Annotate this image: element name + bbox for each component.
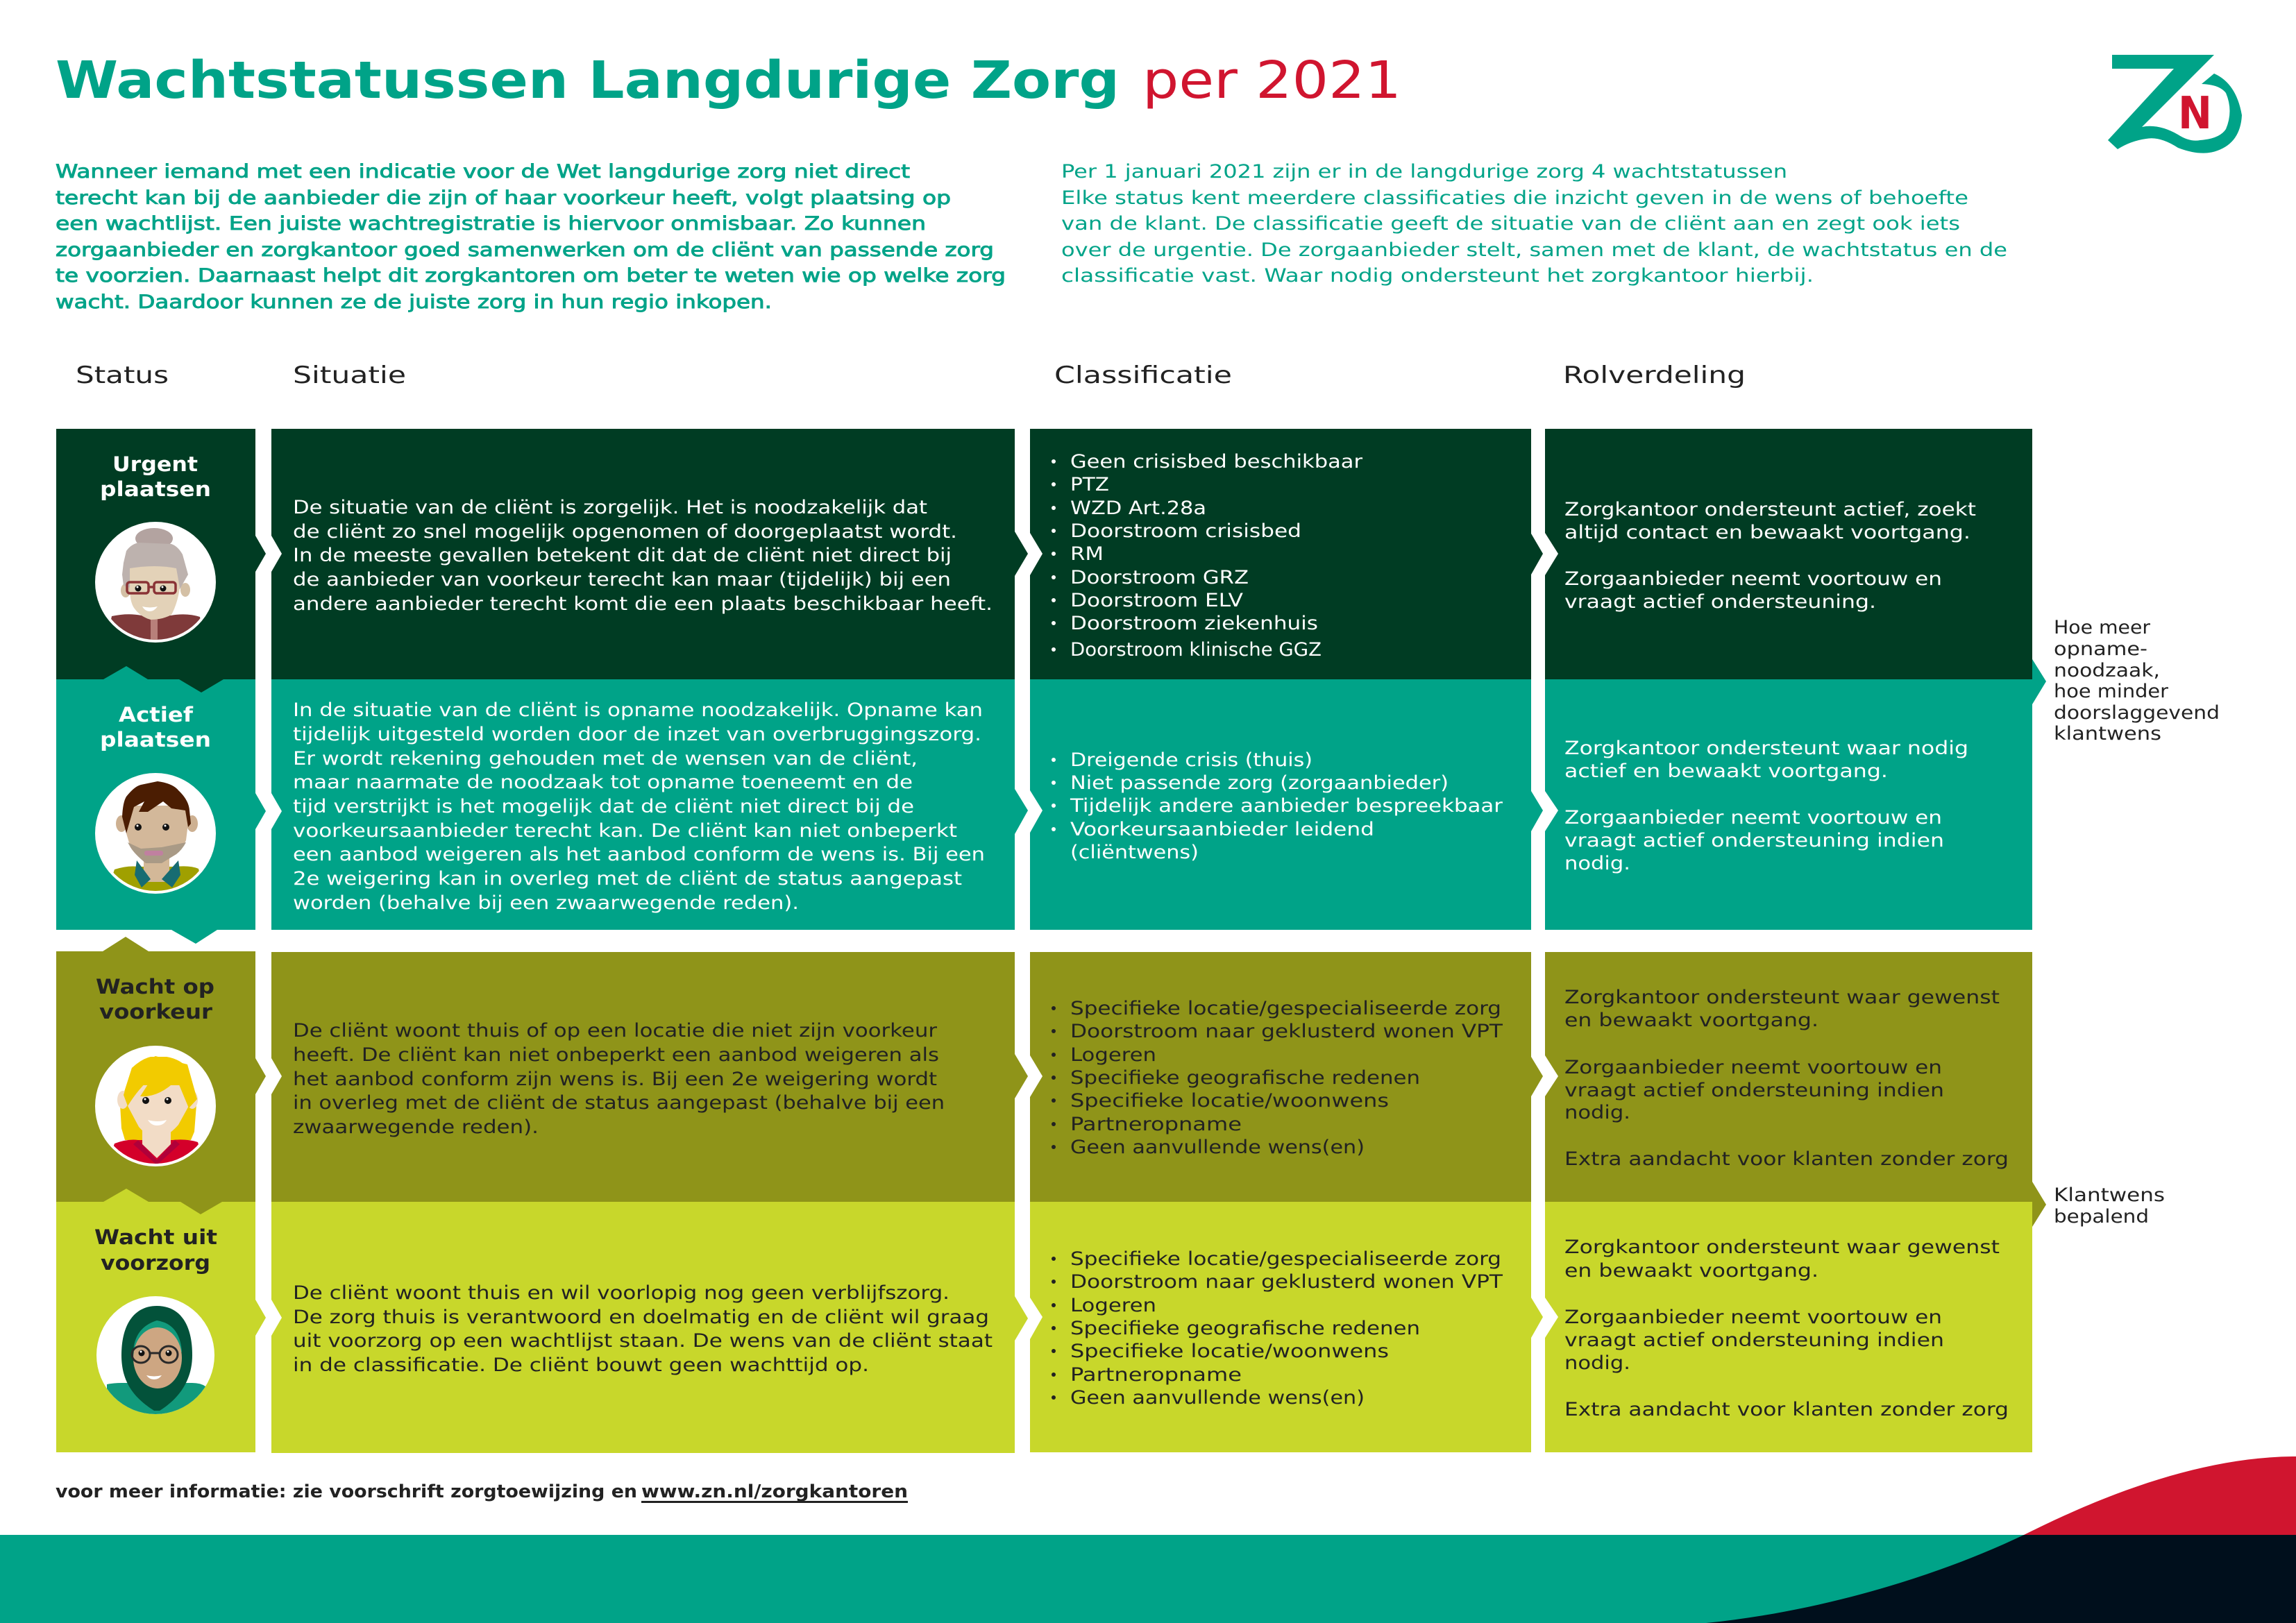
- cell: actief rolverdeling: vraagt actief ondersteuning indien: [1564, 830, 1944, 851]
- status label: wacht op voorkeur: [96, 975, 214, 1023]
- icon: woman with headscarf portrait: [96, 1296, 214, 1418]
- intro text right: classificatie vast. Waar nodig ondersteunt het zorgkantoor hierbij.: [1061, 265, 1814, 287]
- cell: wacht uit voorzorg status background: [56, 1189, 266, 1452]
- label: hoe meer opnamenoodzaak: noodzaak,: [2054, 660, 2160, 681]
- cell: urgent rolverdeling: Zorgkantoor ondersteunt actief, zoekt: [1564, 499, 1976, 520]
- intro text right: [1061, 161, 2007, 287]
- label: hoe meer opnamenoodzaak: [2054, 617, 2220, 745]
- cell: urgent rolverdeling: Zorgaanbieder neemt voortouw en: [1564, 568, 1942, 590]
- cell: urgent situatie: De situatie van de cliënt is zorgelijk. Het is noodzakelijk dat: [293, 497, 927, 518]
- status label: urgent plaatsen: plaatsen: [100, 477, 211, 501]
- logo: ZN: [2108, 55, 2242, 153]
- cell: wacht uit voorzorg classificatie: Logeren: [1070, 1295, 1156, 1316]
- cell: wacht op voorkeur situatie: De cliënt woont thuis of op een locatie die niet zijn voorkeur: [293, 1020, 938, 1042]
- cell: urgent rolverdeling: vraagt actief ondersteuning.: [1564, 591, 1876, 613]
- cell: actief rolverdeling: nodig.: [1564, 853, 1630, 874]
- cell: wacht op voorkeur rolverdeling: Extra aandacht voor klanten zonder zorg: [1564, 1148, 2009, 1170]
- cell: wacht op voorkeur situatie: het aanbod conform zijn wens is. Bij een 2e weigering wordt: [293, 1069, 937, 1090]
- cell: wacht uit voorzorg situatie: uit voorzorg op een wachtlijst staan. De wens van de cliënt staat: [293, 1330, 993, 1352]
- cell: urgent situatie: de cliënt zo snel mogelijk opgenomen of doorgeplaatst wordt.: [293, 521, 957, 543]
- cell: wacht op voorkeur status background: [56, 937, 266, 1202]
- column headings: Rolverdeling: [1563, 362, 1746, 389]
- cell: wacht uit voorzorg classificatie: Specifieke locatie/gespecialiseerde zorg: [1070, 1248, 1501, 1270]
- column headings: [76, 362, 1746, 389]
- cell: wacht uit voorzorg rolverdeling: en bewaakt voortgang.: [1564, 1260, 1818, 1282]
- cell: actief rolverdeling: Zorgaanbieder neemt voortouw en: [1564, 807, 1942, 829]
- cell: urgent rolverdeling: altijd contact en bewaakt voortgang.: [1564, 522, 1970, 543]
- label: klantwens bepalend: Klantwens: [2054, 1184, 2165, 1206]
- footer note: voor meer informatie: zie voorschrift zorgtoewijzing en: [56, 1481, 637, 1502]
- cell: actief situatie: een aanbod weigeren als het aanbod conform de wens is. Bij een: [293, 844, 985, 865]
- status label: wacht uit voorzorg: Wacht uit: [94, 1225, 217, 1249]
- cell: urgent situatie: [271, 429, 1028, 679]
- cell: actief situatie: voorkeursaanbieder terecht kan. De cliënt kan niet onbeperkt: [293, 820, 957, 842]
- cell: urgent situatie: andere aanbieder terecht komt die een plaats beschikbaar heeft.: [293, 593, 993, 615]
- status label: actief plaatsen: Actief: [119, 703, 193, 726]
- cell: wacht op voorkeur situatie: in overleg met de cliënt de status aangepast (behalve bij een: [293, 1092, 945, 1114]
- cell: actief situatie: tijd verstrijkt is het mogelijk dat de cliënt niet direct bij de: [293, 796, 914, 817]
- cell: actief classificatie: [1030, 679, 1543, 930]
- cell: wacht uit voorzorg classificatie: Partneropname: [1070, 1364, 1242, 1386]
- cell: urgent classificatie: Doorstroom crisisbed: [1070, 520, 1301, 542]
- cell: urgent status background: [56, 429, 266, 679]
- intro text right: Elke status kent meerdere classificaties die inzicht geven in de wens of behoefte: [1061, 187, 1968, 209]
- column headings: Classificatie: [1054, 362, 1232, 389]
- icon: older woman portrait: [95, 522, 216, 645]
- cell: urgent classificatie: Geen crisisbed beschikbaar: [1070, 451, 1363, 473]
- cell: urgent classificatie: PTZ: [1070, 474, 1109, 495]
- bottom band: [0, 1456, 2296, 1623]
- cell: wacht op voorkeur classificatie: Specifieke locatie/gespecialiseerde zorg: [1070, 998, 1501, 1019]
- cell: actief status background: [56, 666, 266, 930]
- cell: actief situatie: maar naarmate de noodzaak tot opname toeneemt en de: [293, 772, 913, 793]
- tab: actief down: [171, 930, 217, 944]
- cell: wacht op voorkeur classificatie: Specifieke geografische redenen: [1070, 1067, 1420, 1089]
- intro text left: te voorzien. Daarnaast helpt dit zorgkantoren om beter te weten wie op welke zorg: [56, 265, 1006, 287]
- cell: wacht op voorkeur situatie: zwaarwegende reden).: [293, 1116, 539, 1138]
- label: hoe meer opnamenoodzaak: Hoe meer: [2054, 617, 2151, 638]
- label: hoe meer opnamenoodzaak: hoe minder: [2054, 681, 2169, 702]
- cell: wacht op voorkeur classificatie: [1030, 952, 1543, 1202]
- cell: wacht op voorkeur classificatie: Specifieke locatie/woonwens: [1070, 1090, 1389, 1112]
- cell: actief situatie: [271, 679, 1028, 930]
- cell: wacht uit voorzorg rolverdeling: Zorgkantoor ondersteunt waar gewenst: [1564, 1237, 2000, 1258]
- icon: blonde woman portrait: [95, 1046, 216, 1169]
- label: klantwens bepalend: bepalend: [2054, 1206, 2149, 1227]
- cell: urgent classificatie: RM: [1070, 543, 1104, 565]
- intro text left: een wachtlijst. Een juiste wachtregistratie is hiervoor onmisbaar. Zo kunnen: [56, 213, 926, 235]
- cell: wacht uit voorzorg classificatie: [1030, 1202, 1543, 1452]
- label: hoe meer opnamenoodzaak: opname-: [2054, 638, 2147, 660]
- cell: wacht op voorkeur classificatie: Geen aanvullende wens(en): [1070, 1137, 1365, 1158]
- cell: actief classificatie: Voorkeursaanbieder leidend: [1070, 819, 1374, 840]
- status label: wacht uit voorzorg: [94, 1225, 217, 1275]
- arrow: hoe meer opnamenoodzaak: [2032, 659, 2046, 704]
- cell: actief rolverdeling: actief en bewaakt voortgang.: [1564, 760, 1888, 782]
- label: klantwens bepalend: [2054, 1184, 2165, 1227]
- cell: wacht uit voorzorg rolverdeling: Zorgaanbieder neemt voortouw en: [1564, 1307, 1942, 1328]
- intro text left: Wanneer iemand met een indicatie voor de Wet langdurige zorg niet direct: [56, 161, 910, 182]
- cell: wacht uit voorzorg rolverdeling: Extra aandacht voor klanten zonder zorg: [1564, 1399, 2009, 1420]
- row: actief plaatsen: [56, 666, 2032, 944]
- status label: wacht op voorkeur: Wacht op: [96, 975, 214, 999]
- cell: actief situatie: Er wordt rekening gehouden met de wensen van de cliënt,: [293, 748, 918, 770]
- cell: urgent classificatie: Doorstroom klinische GGZ: [1070, 639, 1322, 661]
- title: Wachtstatussen Langdurige Zorg: [56, 51, 1120, 110]
- cell: wacht uit voorzorg classificatie: Specifieke locatie/woonwens: [1070, 1341, 1389, 1362]
- cell: wacht op voorkeur rolverdeling: nodig.: [1564, 1102, 1630, 1123]
- icon: bearded man portrait: [95, 773, 216, 896]
- row: wacht op voorkeur: [56, 937, 2032, 1202]
- cell: wacht op voorkeur classificatie: Logeren: [1070, 1044, 1156, 1066]
- cell: actief classificatie: Dreigende crisis (thuis): [1070, 749, 1312, 771]
- intro text left: terecht kan bij de aanbieder die zijn of haar voorkeur heeft, volgt plaatsing op: [56, 187, 951, 209]
- cell: wacht uit voorzorg rolverdeling: [1545, 1202, 2032, 1452]
- intro text right: Per 1 januari 2021 zijn er in de langdurige zorg 4 wachtstatussen: [1061, 161, 1787, 182]
- cell: actief situatie: tijdelijk uitgesteld worden door de inzet van overbruggingszorg.: [293, 724, 981, 745]
- cell: actief situatie: worden (behalve bij een zwaarwegende reden).: [293, 892, 799, 914]
- cell: wacht op voorkeur situatie: [271, 952, 1028, 1202]
- cell: wacht op voorkeur situatie: heeft. De cliënt kan niet onbeperkt een aanbod weigeren als: [293, 1044, 939, 1066]
- cell: wacht uit voorzorg situatie: in de classificatie. De cliënt bouwt geen wachttijd op.: [293, 1354, 869, 1376]
- intro text left: zorgaanbieder en zorgkantoor goed samenwerken om de cliënt van passende zorg: [56, 239, 994, 261]
- cell: wacht op voorkeur rolverdeling: vraagt actief ondersteuning indien: [1564, 1080, 1944, 1101]
- logo: ZN: N: [2178, 88, 2212, 139]
- cell: wacht uit voorzorg classificatie: Geen aanvullende wens(en): [1070, 1387, 1365, 1409]
- cell: wacht op voorkeur rolverdeling: Zorgaanbieder neemt voortouw en: [1564, 1057, 1942, 1078]
- tab: urgent down into actief: [179, 679, 223, 692]
- cell: wacht op voorkeur classificatie: Doorstroom naar geklusterd wonen VPT: [1070, 1021, 1503, 1042]
- status label: actief plaatsen: plaatsen: [100, 728, 211, 751]
- cell: wacht uit voorzorg situatie: De cliënt woont thuis en wil voorlopig nog geen verblijfszorg.: [293, 1282, 949, 1304]
- cell: actief rolverdeling: Zorgkantoor ondersteunt waar nodig: [1564, 738, 1968, 759]
- cell: wacht uit voorzorg situatie: [271, 1202, 1028, 1453]
- column headings: Situatie: [293, 362, 406, 389]
- arrow: klantwens bepalend: [2032, 1182, 2046, 1227]
- status label: urgent plaatsen: Urgent: [112, 452, 198, 476]
- cell: actief classificatie: Tijdelijk andere aanbieder bespreekbaar: [1070, 795, 1503, 817]
- label: hoe meer opnamenoodzaak: doorslaggevend: [2054, 702, 2220, 724]
- cell: actief rolverdeling: [1545, 679, 2032, 930]
- cell: urgent classificatie: Doorstroom GRZ: [1070, 567, 1249, 588]
- row: wacht uit voorzorg: [56, 1189, 2032, 1453]
- footer note: [56, 1481, 908, 1503]
- cell: urgent situatie: In de meeste gevallen betekent dit dat de cliënt niet direct bij: [293, 545, 952, 566]
- cell: urgent classificatie: WZD Art.28a: [1070, 498, 1206, 519]
- label: hoe meer opnamenoodzaak: klantwens: [2054, 723, 2161, 745]
- cell: urgent classificatie: Doorstroom ziekenhuis: [1070, 613, 1318, 634]
- cell: wacht uit voorzorg classificatie: Doorstroom naar geklusterd wonen VPT: [1070, 1271, 1503, 1293]
- tab: olive down into lime: [180, 1202, 222, 1214]
- column headings: Status: [76, 362, 169, 389]
- cell: urgent classificatie: Doorstroom ELV: [1070, 590, 1244, 611]
- title: per 2021: [1142, 51, 1401, 110]
- cell: wacht uit voorzorg classificatie: Specifieke geografische redenen: [1070, 1318, 1420, 1339]
- intro text right: van de klant. De classificatie geeft de situatie van de cliënt aan en zegt ook iets: [1061, 213, 1960, 235]
- status label: actief plaatsen: [100, 703, 211, 751]
- cell: actief situatie: In de situatie van de cliënt is opname noodzakelijk. Opname kan: [293, 699, 983, 721]
- cell: urgent situatie: de aanbieder van voorkeur terecht kan maar (tijdelijk) bij een: [293, 569, 951, 590]
- row: urgent plaatsen: [56, 429, 2032, 679]
- status label: urgent plaatsen: [100, 452, 211, 501]
- cell: urgent rolverdeling: [1545, 429, 2032, 679]
- cell: actief situatie: 2e weigering kan in overleg met de cliënt de status aangepast: [293, 868, 962, 890]
- intro text right: over de urgentie. De zorgaanbieder stelt, samen met de klant, de wachtstatus en de: [1061, 239, 2007, 261]
- footer note: www.zn.nl/zorgkantoren: [641, 1481, 908, 1502]
- cell: wacht op voorkeur rolverdeling: [1545, 952, 2032, 1202]
- cell: wacht op voorkeur classificatie: Partneropname: [1070, 1114, 1242, 1135]
- status label: wacht op voorkeur: voorkeur: [99, 1000, 213, 1023]
- cell: wacht uit voorzorg situatie: De zorg thuis is verantwoord en doelmatig en de cliënt wil graag: [293, 1307, 989, 1328]
- cell: urgent classificatie: [1030, 429, 1543, 679]
- cell: actief classificatie: Niet passende zorg (zorgaanbieder): [1070, 772, 1449, 794]
- cell: actief classificatie: (cliëntwens): [1070, 842, 1199, 863]
- cell: wacht uit voorzorg rolverdeling: vraagt actief ondersteuning indien: [1564, 1329, 1944, 1351]
- intro text left: [56, 161, 1006, 313]
- intro text left: wacht. Daardoor kunnen ze de juiste zorg in hun regio inkopen.: [56, 291, 772, 313]
- cell: wacht op voorkeur rolverdeling: en bewaakt voortgang.: [1564, 1010, 1818, 1031]
- cell: wacht op voorkeur rolverdeling: Zorgkantoor ondersteunt waar gewenst: [1564, 987, 2000, 1008]
- cell: wacht uit voorzorg rolverdeling: nodig.: [1564, 1352, 1630, 1374]
- status label: wacht uit voorzorg: voorzorg: [101, 1251, 210, 1275]
